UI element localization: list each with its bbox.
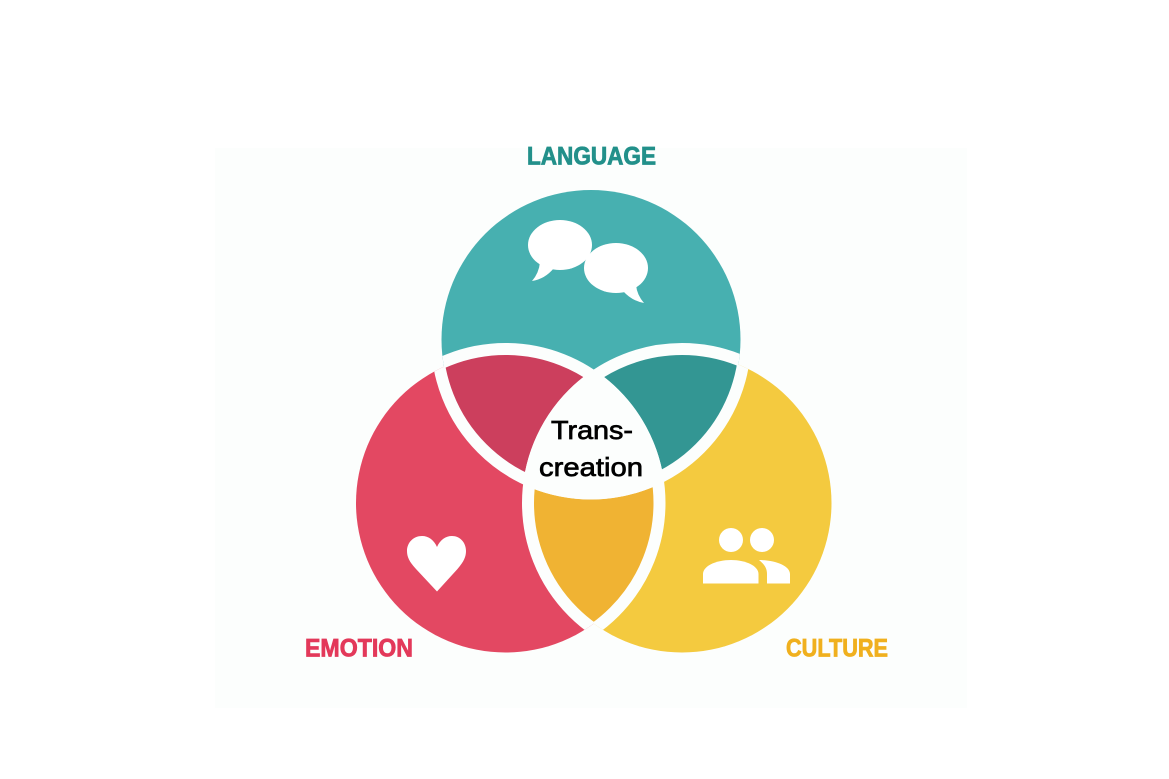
overlap: emotion and culture: [534, 488, 654, 622]
circle: emotion: [356, 354, 655, 652]
icon: heart: [407, 536, 466, 592]
ring: emotion outline: [442, 343, 666, 630]
circle: culture: [532, 354, 832, 652]
overlap: language and culture: [604, 355, 737, 470]
heading: emotion: EMOTION: [305, 634, 413, 662]
overlap: language and emotion: [446, 355, 583, 472]
ring: culture outline: [522, 343, 740, 630]
background panel: [215, 148, 967, 708]
ring: language outline: [434, 364, 748, 500]
heading: language: LANGUAGE: [527, 142, 656, 170]
heading: culture: CULTURE: [786, 634, 888, 662]
centre label: [539, 415, 643, 482]
icon: people: [703, 528, 790, 584]
icon: speech bubbles: [528, 220, 648, 303]
centre label: creation: [539, 452, 643, 482]
centre region: [525, 377, 662, 500]
circle: language: [442, 190, 740, 489]
centre label: Trans-: [551, 415, 633, 445]
venn diagram: [352, 186, 842, 663]
